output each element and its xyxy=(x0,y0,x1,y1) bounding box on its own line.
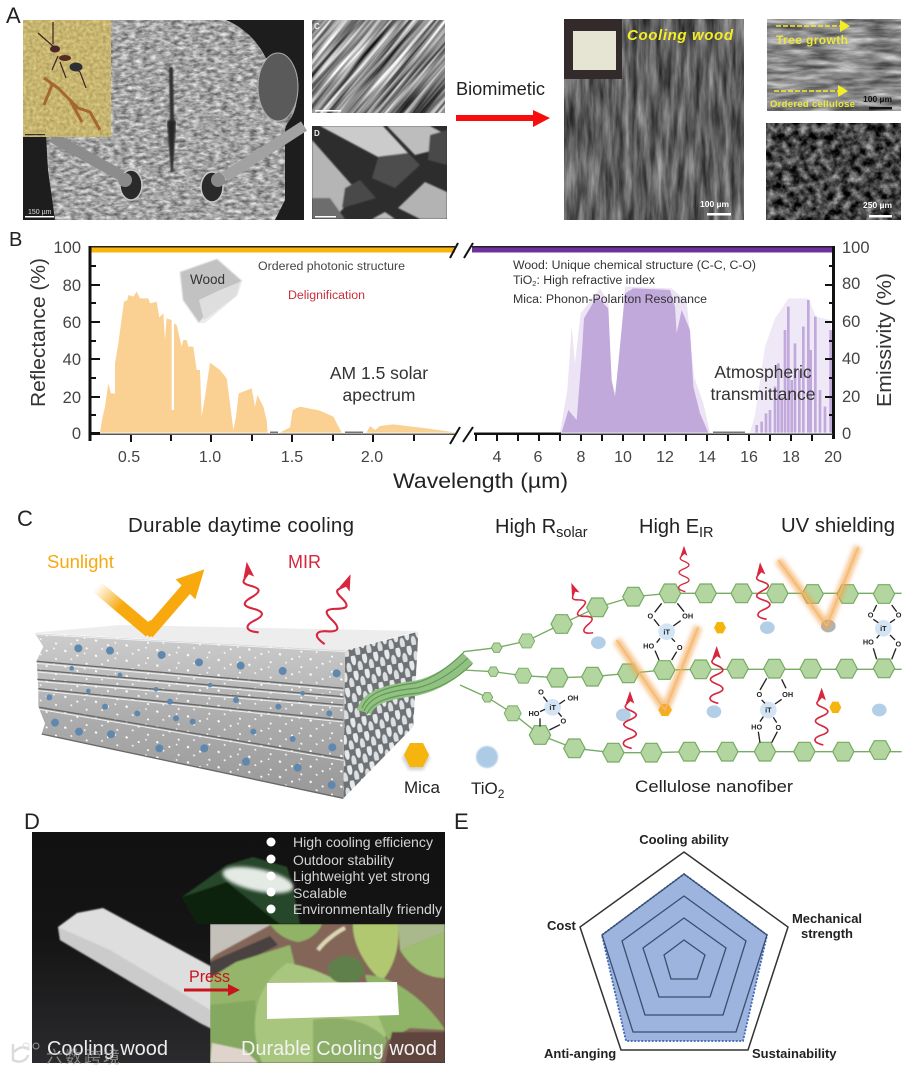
scale bar: 250 µm xyxy=(863,200,892,210)
x axis tick labels: 10 xyxy=(614,449,632,466)
label: wood chemistry: Wood: Unique chemical structure (C-C, C-O) xyxy=(513,260,756,272)
small grey gaps on axis xyxy=(270,432,745,433)
label: wood chemistry: 2 xyxy=(532,281,537,288)
front face xyxy=(35,633,345,798)
outer pentagon xyxy=(580,852,788,1050)
x axis tick labels: 4 xyxy=(493,449,502,466)
side face with lumens xyxy=(343,632,418,798)
panel A: micrograph D xyxy=(312,126,447,219)
ring 2 xyxy=(643,918,726,997)
heading: durable daytime cooling: Durable daytime cooling xyxy=(128,514,354,537)
feature bullets: High cooling efficiency xyxy=(293,834,433,850)
titanium complex 4: HO xyxy=(863,637,874,646)
panel A: porous micrograph xyxy=(766,123,901,220)
titanium complex 1 xyxy=(643,603,693,660)
label: AM 1.5 solar spectrum xyxy=(330,363,428,405)
panel A: micrograph D: D xyxy=(314,129,320,138)
panel E: radar chart xyxy=(544,832,862,1061)
axis labels: Anti-anging xyxy=(544,1046,616,1061)
cooling wood strip xyxy=(58,908,214,1030)
data region xyxy=(602,874,767,1041)
panel C: cellulose network xyxy=(460,546,902,762)
panel label C: C xyxy=(17,506,33,531)
axis labels: Sustainability xyxy=(752,1046,837,1061)
heading: high E IR: High E xyxy=(639,516,699,538)
UV reflection left xyxy=(617,627,698,710)
x axis tick labels: 1.0 xyxy=(199,449,221,466)
feature bullets: Scalable xyxy=(293,885,347,901)
y axis title right: Emissivity (%) xyxy=(874,273,896,407)
label: delignification: Delignification xyxy=(288,290,365,302)
titanium complex 4: O xyxy=(896,611,902,620)
titanium complex 2: iT xyxy=(549,703,556,712)
left axis tick labels: 60 xyxy=(63,314,81,332)
TiO2 particles xyxy=(591,620,887,721)
titanium complex 3 xyxy=(751,678,793,743)
legend: mica xyxy=(402,743,440,797)
UV reflection right xyxy=(778,547,858,626)
top chain hexagons xyxy=(491,584,895,652)
plant photo xyxy=(210,924,445,1063)
TiO2 particles in wood xyxy=(46,644,341,789)
compound eye xyxy=(258,53,298,121)
durable white sample xyxy=(267,982,399,1019)
dark leaf xyxy=(182,857,300,924)
axis labels: strength xyxy=(801,926,853,941)
label: AM 1.5 solar spectrum: AM 1.5 solar xyxy=(330,363,428,383)
label: wood chemistry xyxy=(513,260,756,306)
titanium complex 4: iT xyxy=(880,624,887,633)
left axis tick labels xyxy=(53,239,81,443)
cooling wood title: Cooling wood xyxy=(627,27,734,44)
panel label E: E xyxy=(454,809,469,834)
label: wood chemistry: : High refractive index xyxy=(536,275,655,287)
watermark xyxy=(13,1043,120,1067)
label: AM 1.5 solar spectrum: apectrum xyxy=(343,385,415,405)
groove lines xyxy=(37,661,343,798)
legend: TiO2 xyxy=(471,746,505,801)
chain lines xyxy=(460,593,902,753)
icon: wood block: Wood xyxy=(190,272,225,287)
atmospheric window area xyxy=(560,287,833,433)
titanium complex 4: O xyxy=(895,640,901,649)
legend: TiO2: TiO xyxy=(471,779,498,798)
left axis tick labels: 40 xyxy=(63,351,81,369)
heading: high R solar: solar xyxy=(556,525,588,541)
wave: MIR emission left xyxy=(238,561,264,634)
press label: Press xyxy=(189,967,230,986)
right axis tick labels xyxy=(842,239,870,443)
middle chain hexagons xyxy=(488,659,895,687)
feature bullets xyxy=(266,834,442,917)
head surface xyxy=(40,20,302,220)
wave: MIR emission right xyxy=(315,571,358,646)
titanium complex 2: OH xyxy=(567,693,578,702)
ring 3 xyxy=(622,896,746,1015)
x axis tick labels: 2.0 xyxy=(361,449,383,466)
titanium complex 3: O xyxy=(775,723,781,732)
bottom chain hexagons xyxy=(482,693,891,762)
mica particles xyxy=(658,622,841,716)
panel B: spectrum chart xyxy=(28,239,896,493)
y axis title left: Reflectance (%) xyxy=(28,258,50,407)
right axis tick labels: 0 xyxy=(842,425,851,443)
panel label A: A xyxy=(6,3,21,28)
x axis tick labels xyxy=(118,449,842,466)
panel label D: D xyxy=(24,809,40,834)
left axis tick labels: 20 xyxy=(63,389,81,407)
right axis tick labels: 60 xyxy=(842,313,860,331)
watermark: 六数跨境 xyxy=(46,1048,120,1067)
top face xyxy=(35,625,418,651)
titanium complex 2: O xyxy=(560,716,566,725)
titanium complex 1: HO xyxy=(643,642,654,651)
panel A: ordered cellulose micrograph: Tree growth xyxy=(776,33,848,47)
panel A: ordered cellulose micrograph: Ordered cellulose xyxy=(770,99,855,110)
MIR waves xyxy=(565,546,828,748)
heading: high R solar: High R xyxy=(495,516,556,538)
inset photo of cooling wood xyxy=(564,19,622,79)
panel A: ordered cellulose micrograph xyxy=(767,19,901,111)
prey xyxy=(44,78,100,130)
panel A: cooling wood micrograph xyxy=(564,19,744,220)
right axis tick labels: 40 xyxy=(842,350,860,368)
x axis tick labels: 12 xyxy=(656,449,674,466)
x axis tick labels: 18 xyxy=(782,449,800,466)
right axis tick labels: 100 xyxy=(842,239,870,257)
feature bullets: Environmentally friendly xyxy=(293,901,442,917)
scale bar 150 um xyxy=(25,209,54,218)
caption: cooling wood: Cooling wood xyxy=(47,1037,168,1060)
label: ordered photonic structure: Ordered photonic structure xyxy=(258,261,405,273)
label: atmospheric transmittance: Atmospheric xyxy=(714,362,812,382)
panel A: ant head micrograph xyxy=(23,20,304,220)
ring 4 xyxy=(602,874,767,1032)
arrow: ordered cellulose xyxy=(774,85,848,97)
titanium complex 3: O xyxy=(756,690,762,699)
label: cellulose nanofiber: Cellulose nanofiber xyxy=(635,777,793,796)
titanium complex 1: O xyxy=(647,612,653,621)
x axis tick labels: 1.5 xyxy=(281,449,303,466)
wood block illustration xyxy=(35,561,418,798)
x axis tick labels: 0.5 xyxy=(118,449,140,466)
antennae xyxy=(52,126,304,202)
label: wood chemistry: Mica: Phonon-Polariton Resonance xyxy=(513,294,707,306)
left axis tick labels: 80 xyxy=(63,277,81,295)
arrow: tree growth xyxy=(776,20,850,32)
panel label B: B xyxy=(9,229,22,251)
x axis tick labels: 20 xyxy=(824,449,842,466)
right axis tick labels: 20 xyxy=(842,388,860,406)
inset: ant photo xyxy=(23,20,111,137)
right axis tick labels: 80 xyxy=(842,275,860,293)
caption: durable cooling wood: Durable Cooling wood xyxy=(241,1037,437,1060)
panel A: micrograph C xyxy=(312,20,445,113)
solar spectrum area xyxy=(100,292,457,433)
cellulose fibre bundle xyxy=(362,652,472,714)
scale bar xyxy=(700,199,731,216)
left axis tick labels: 100 xyxy=(53,239,81,257)
titanium complex 1: iT xyxy=(663,627,670,636)
label: wood chemistry: TiO xyxy=(513,275,531,287)
scale bar: 100 µm xyxy=(700,199,729,209)
axes frame xyxy=(88,243,835,444)
titanium complex 2 xyxy=(528,687,578,730)
label: sunlight: Sunlight xyxy=(47,551,114,572)
legend: mica: Mica xyxy=(404,778,440,797)
titanium complex 4: O xyxy=(868,611,874,620)
panel D: photo composite xyxy=(13,832,445,1067)
x axis tick labels: 6 xyxy=(534,449,543,466)
titanium complex 3: OH xyxy=(782,690,793,699)
biomimetic label: Biomimetic xyxy=(456,79,545,99)
label: atmospheric transmittance xyxy=(710,362,816,404)
panel A: micrograph C: C xyxy=(314,22,320,31)
titanium complex 1: OH xyxy=(682,611,693,620)
feature bullets: Lightweight yet strong xyxy=(293,868,430,884)
dark background photo xyxy=(32,832,445,1063)
titanium complex 2: HO xyxy=(528,709,540,718)
central ridge xyxy=(168,68,175,172)
feature bullets: Outdoor stability xyxy=(293,852,394,868)
arrow: reflected sunlight xyxy=(97,569,204,637)
axis labels: Mechanical xyxy=(792,911,862,926)
titanium complex 1: O xyxy=(677,643,683,652)
press arrow xyxy=(184,984,240,996)
scale bar: 100 µm xyxy=(863,94,892,104)
left axis tick labels: 0 xyxy=(72,425,81,443)
ant figure xyxy=(38,22,86,88)
label: MIR: MIR xyxy=(288,552,321,572)
x axis tick labels: 16 xyxy=(740,449,758,466)
ring 1 xyxy=(664,940,705,979)
axis labels: Cooling ability xyxy=(639,832,730,847)
scale bar 150 um: 150 µm xyxy=(28,209,52,216)
titanium complex 2: O xyxy=(538,687,544,696)
axis labels xyxy=(544,832,862,1061)
titanium complex 3: HO xyxy=(751,722,762,731)
heading: UV shielding: UV shielding xyxy=(781,515,895,537)
titanium complex 4 xyxy=(863,605,902,659)
label: atmospheric transmittance: transmittance xyxy=(710,384,816,404)
x axis tick labels: 14 xyxy=(698,449,716,466)
red arrow xyxy=(456,110,550,127)
titanium complex 3: iT xyxy=(765,706,772,715)
x axis title: Wavelength (µm) xyxy=(393,470,568,493)
x axis tick labels: 8 xyxy=(577,449,586,466)
legend: TiO2: 2 xyxy=(498,787,505,801)
icon: wood block xyxy=(180,259,242,323)
heading: high E IR: IR xyxy=(699,525,714,541)
axis labels: Cost xyxy=(547,918,577,933)
